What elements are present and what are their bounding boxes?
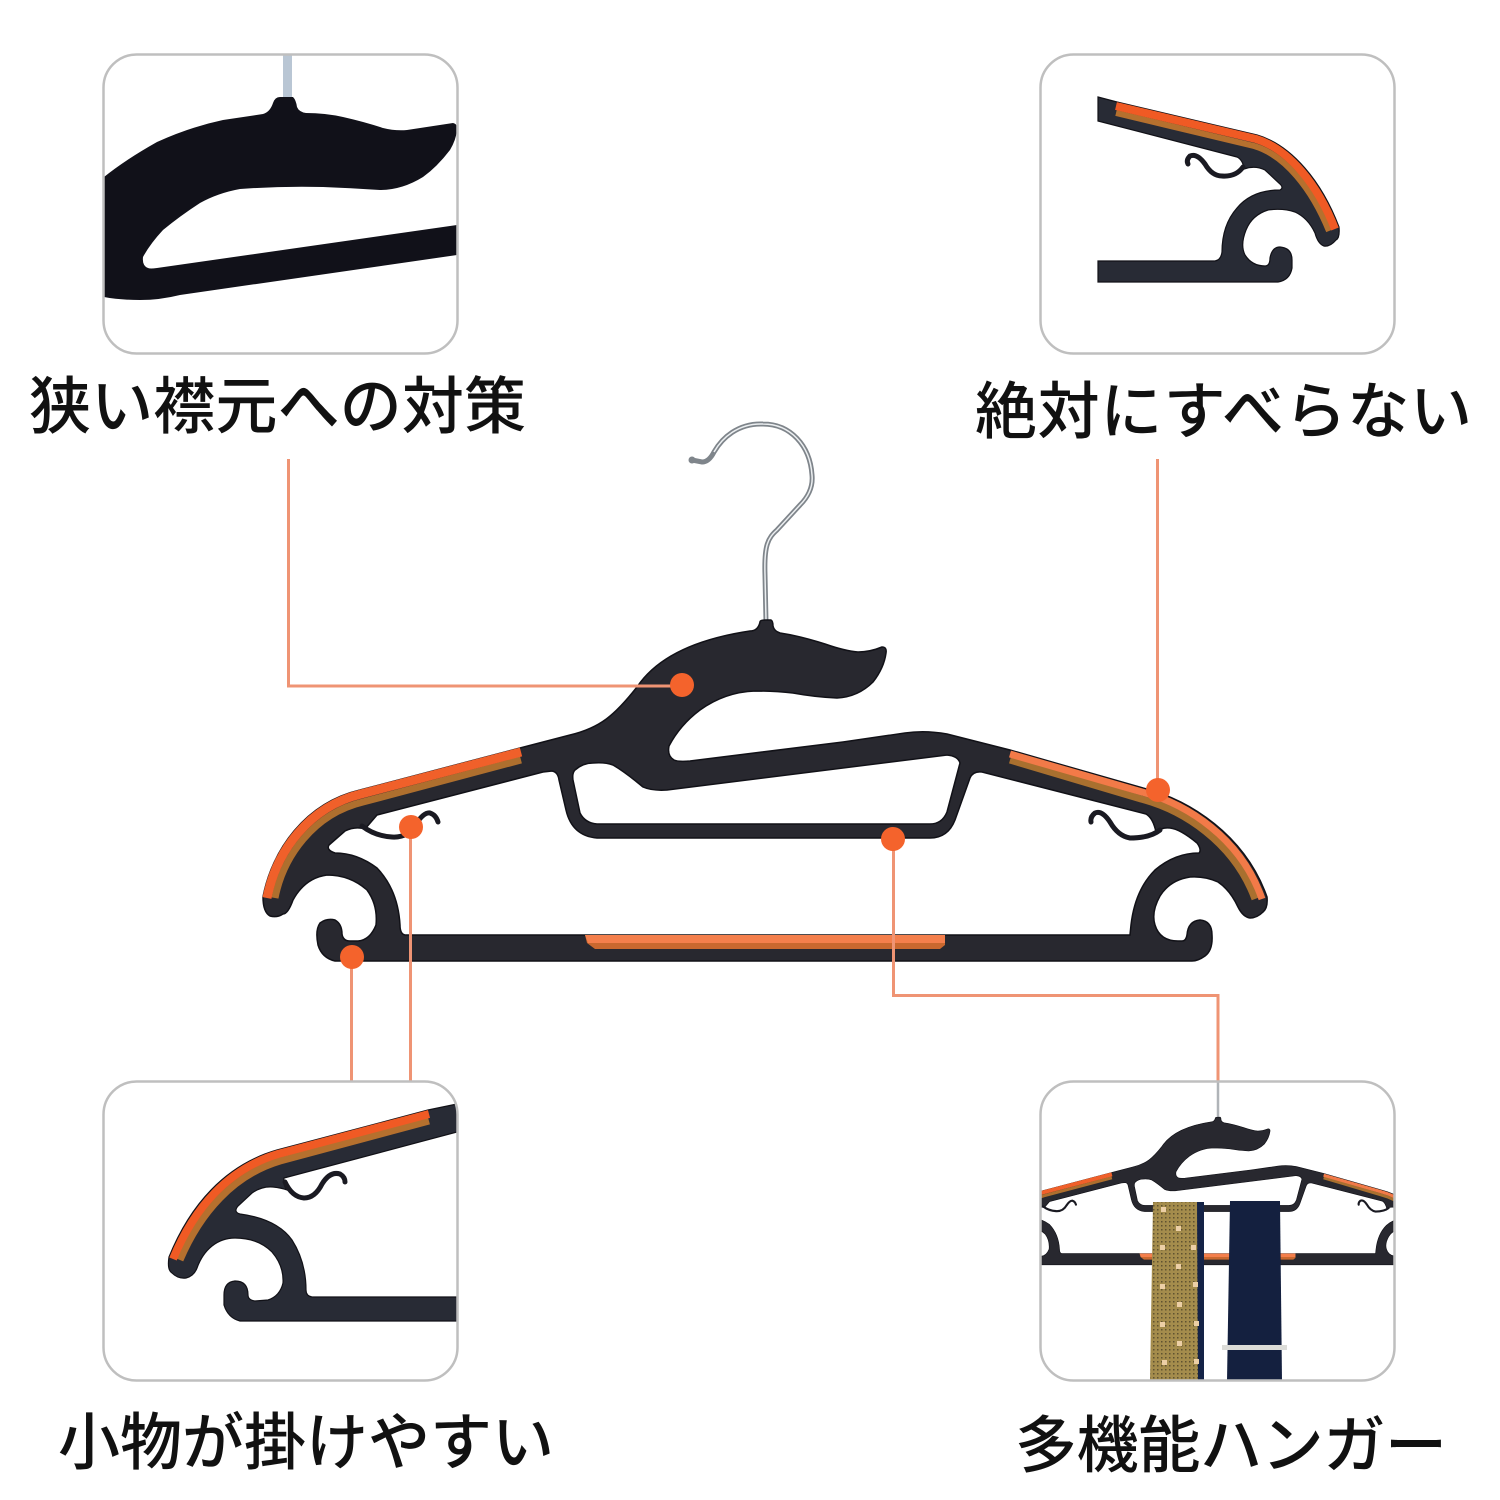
gold patterned tie (1150, 1202, 1199, 1381)
panel: narrow collar close-up (104, 54, 458, 354)
icon: hook wire close-up (283, 54, 292, 98)
marker: collar (670, 673, 694, 697)
callout line: small item hook (350, 957, 353, 1081)
panel: multi-function hanger with ties (1039, 1080, 1396, 1382)
navy tie back strip (1197, 1202, 1204, 1381)
heading: narrow collar: 狭い襟元への対策 (29, 373, 526, 442)
hanger end close-up (168, 1104, 457, 1321)
marker: accessory clip (399, 815, 423, 839)
hanger body with orange grips (263, 620, 1267, 961)
callout line: collar (288, 459, 682, 686)
icon: silver hook (688, 424, 812, 622)
hook wire (1217, 1081, 1219, 1118)
heading: never slips: 絶対にすべらない (975, 378, 1472, 447)
heading: multi-function hanger: 多機能ハンガー (1015, 1412, 1447, 1481)
navy tie with clip (1222, 1201, 1287, 1381)
marker: non-slip edge (1146, 778, 1170, 802)
marker: multi-function bar (881, 827, 905, 851)
panel: non-slip edge close-up (1040, 54, 1394, 354)
marker: small item hook (340, 945, 364, 969)
callout line: accessory clip (409, 827, 412, 1081)
hanger shoulder close-up (104, 97, 457, 300)
callout line: multi-function (894, 839, 1218, 1082)
main hanger (263, 424, 1267, 961)
panel: small item hook close-up (104, 1082, 458, 1380)
callout line: non-slip edge (1156, 459, 1159, 790)
heading: small items: 小物が掛けやすい (58, 1409, 554, 1478)
small hanger (1042, 1116, 1394, 1266)
hanger end close-up (1098, 97, 1339, 282)
